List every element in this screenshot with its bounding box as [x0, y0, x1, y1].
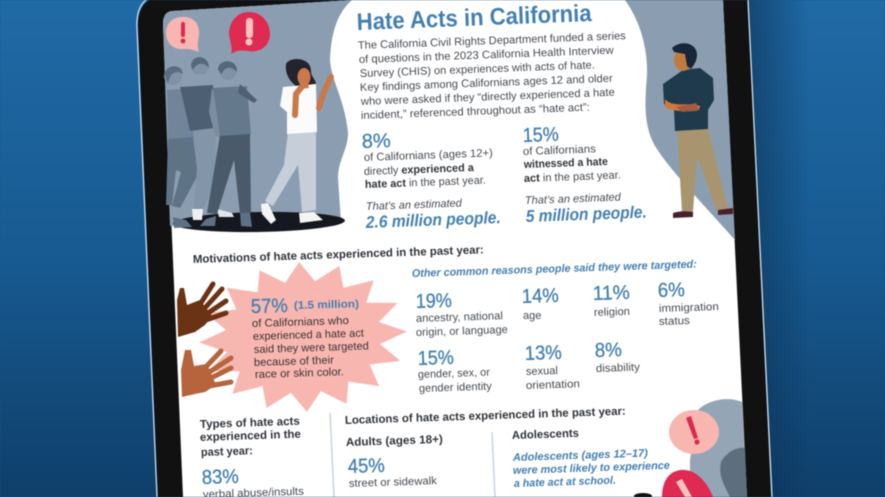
stat: 8% experienced: 8% — [361, 130, 391, 153]
types of hate acts block: 83% — [201, 466, 239, 489]
stat: 15% gender: 15% — [417, 347, 454, 370]
intro paragraph: Key findings among Californians ages 12 and older — [360, 73, 613, 94]
stat: 15% gender: gender, sex, or — [418, 367, 490, 381]
intro paragraph — [358, 30, 626, 122]
stat: 11% religion — [592, 282, 630, 319]
stat: 14% age: age — [523, 310, 541, 322]
illustration: speech bubble pink — [166, 17, 199, 52]
stat: 6% immigration: status — [659, 315, 691, 328]
adolescents location block — [512, 428, 670, 490]
stat: 14% age: 14% — [521, 285, 559, 308]
stat: 15% gender — [417, 347, 493, 395]
intro paragraph: of questions in the 2023 California Health Interview — [359, 45, 614, 66]
stat: 8% experienced — [361, 130, 501, 232]
stat: 8% experienced: 2.6 million people. — [365, 208, 501, 232]
heading: locations: Locations of hate acts experienced in the past year: — [345, 406, 626, 427]
adolescents location block: a hate act at school. — [514, 475, 616, 490]
stat: 8% experienced: hate act in the past year. — [365, 175, 486, 191]
stat: 8% disability: 8% — [594, 339, 622, 362]
stat: 15% witnessed: That’s an estimated — [525, 191, 622, 207]
stat: 13% sexual orientation: sexual — [526, 365, 558, 378]
starburst callout — [195, 257, 411, 417]
stat: 6% immigration: immigration — [659, 301, 719, 315]
stat: 11% religion: 11% — [592, 282, 630, 305]
stat: 15% witnessed: 5 million people. — [525, 203, 647, 226]
stat: 13% sexual orientation: orientation — [526, 378, 580, 392]
starburst callout: experienced a hate act — [253, 328, 364, 343]
starburst callout: because of their — [254, 354, 334, 369]
stat: 6% immigration — [657, 279, 719, 328]
adolescents location block: Adolescents (ages 12–17) — [512, 448, 648, 464]
adults location block: street or sidewalk — [349, 475, 438, 490]
stat: 13% sexual orientation: 13% — [524, 342, 562, 365]
stat: 8% disability — [594, 339, 641, 375]
intro paragraph: The California Civil Rights Department funded a series — [358, 30, 626, 52]
stat: 19% ancestry — [415, 290, 508, 339]
stat: 8% experienced: of Californians (ages 12+) — [364, 147, 493, 164]
illustration: speech bubble red — [229, 12, 270, 54]
adults location block: 45% — [347, 455, 385, 478]
icon: dark hand — [177, 284, 226, 337]
title: Hate Acts in California — [356, 0, 593, 36]
stat: 19% ancestry: 19% — [415, 290, 452, 313]
panel: left grey illustration background — [163, 0, 352, 226]
intro paragraph: incident,” referenced throughout as “hate act”: — [361, 102, 590, 122]
stat: 15% witnessed: of Californians — [523, 143, 597, 158]
types of hate acts block: Types of hate acts — [200, 416, 300, 431]
heading: other common reasons: Other common reasons people said they were targeted: — [412, 259, 697, 280]
illustration: ground shadow — [173, 211, 345, 233]
stat: 19% ancestry: origin, or language — [416, 324, 508, 339]
stat: 15% gender: gender identity — [419, 381, 493, 395]
tablet shadow on background — [748, 0, 810, 497]
intro paragraph: who were asked if they “directly experienced a hate — [360, 87, 615, 108]
starburst callout: race or skin color. — [255, 366, 344, 381]
intro paragraph: Survey (CHIS) on experiences with acts of hate. — [360, 59, 595, 80]
starburst callout: said they were targeted — [254, 340, 369, 356]
stat: 15% witnessed — [522, 124, 647, 226]
types of hate acts block — [200, 416, 305, 497]
stat: 15% witnessed: witnessed a hate — [523, 156, 608, 171]
illustration: distressed woman — [261, 59, 331, 224]
illustration: man with crossed arms — [663, 43, 733, 218]
illustration: group of harassing men — [164, 57, 257, 228]
starburst callout: of Californians who — [252, 315, 349, 330]
types of hate acts block: experienced in the — [200, 429, 301, 444]
stat: 8% experienced: That’s an estimated — [366, 197, 463, 213]
illustration: bottom right crowd with alert bubbles — [634, 399, 747, 497]
adolescents location block: Adolescents — [512, 428, 579, 442]
adults location block: Adults (ages 18+) — [346, 434, 443, 449]
types of hate acts block: past year: — [201, 445, 253, 459]
heading: motivations: Motivations of hate acts experienced in the past year: — [193, 244, 484, 266]
panel: right grey illustration background — [625, 0, 735, 240]
stat: 19% ancestry: ancestry, national — [416, 310, 503, 325]
stat: 8% disability: disability — [596, 362, 641, 375]
starburst callout: 57% — [251, 295, 288, 318]
starburst callout: (1.5 million) — [294, 298, 359, 312]
tablet device — [137, 0, 772, 497]
adults location block — [346, 434, 443, 490]
adolescents location block: were most likely to experience — [513, 460, 670, 477]
stat: 13% sexual orientation — [524, 342, 580, 392]
icon: light hand — [181, 350, 231, 397]
stat: 15% witnessed: act in the past year. — [524, 169, 621, 185]
stat: 11% religion: religion — [594, 306, 630, 319]
stat: 14% age — [521, 285, 559, 322]
stat: 8% experienced: directly experienced a — [364, 162, 475, 178]
stat: 15% witnessed: 15% — [522, 124, 559, 147]
stat: 6% immigration: 6% — [657, 279, 685, 302]
